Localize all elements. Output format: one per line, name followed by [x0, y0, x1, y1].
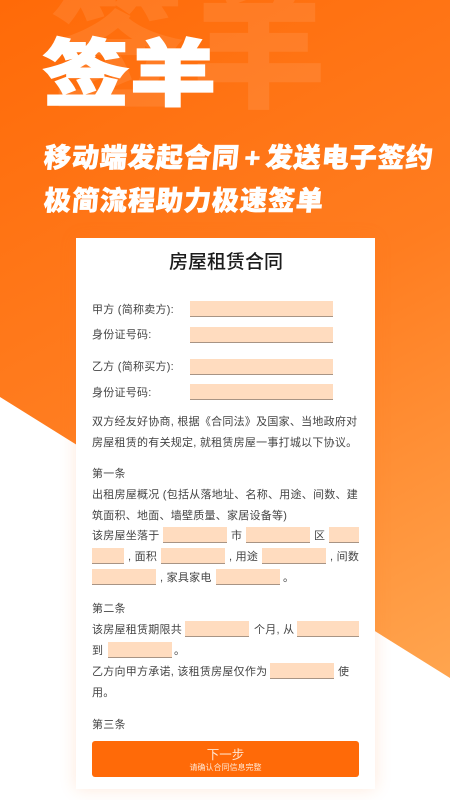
article three heading: 第三条 [92, 719, 126, 731]
article one fill-in rows: 区 [314, 530, 325, 542]
article one fill-in rows: 。 [283, 572, 294, 584]
intro paragraph: 双方经友好协商, 根据《合同法》及国家、当地政府对 [92, 416, 357, 428]
article one overview: 筑面积、地面、墙壁质量、家居设备等) [92, 510, 287, 522]
article one fill-in rows: , 家具家电 [160, 572, 212, 584]
contract heading: 房屋租赁合同 [169, 252, 283, 273]
article two fill-in rows: 。 [174, 645, 185, 657]
subtitle line one: 移动端发起合同 + 发送电子签约 [43, 143, 435, 173]
article two fill-in rows: 到 [92, 645, 103, 657]
intro paragraph: 房屋租赁的有关规定, 就租赁房屋一事打城以下协议。 [92, 437, 357, 449]
article two fill-in rows: 乙方向甲方承诺, 该租赁房屋仅作为 [92, 666, 267, 678]
article one fill-in rows: 该房屋坐落于 [92, 530, 160, 542]
article two fill-in rows: 个月, 从 [254, 624, 294, 636]
article two fill-in rows: 用。 [92, 687, 114, 699]
article one fill-in rows [92, 527, 359, 585]
article two heading: 第二条 [92, 603, 126, 615]
party B ID field [190, 384, 333, 400]
party A ID field [190, 327, 333, 343]
article one fill-in rows: , 间数 [330, 551, 359, 563]
article two fill-in rows: 使 [338, 666, 349, 678]
article two fill-in rows [92, 621, 359, 699]
article one overview [92, 488, 358, 522]
subtitle line two: 极简流程助力极速签单 [43, 186, 325, 216]
party A name label: 甲方 (简称卖方): [92, 304, 174, 316]
article two fill-in rows: 该房屋租赁期限共 [92, 624, 182, 636]
article one fill-in rows: , 面积 [128, 551, 157, 563]
party B name field [190, 359, 333, 375]
party B ID label: 身份证号码: [92, 387, 152, 399]
intro paragraph [92, 416, 357, 449]
title: 签羊 [43, 35, 217, 115]
next step button [92, 741, 359, 777]
party B name label: 乙方 (简称买方): [92, 361, 174, 373]
party A name field [190, 301, 333, 317]
next step button: 请确认合同信息完整 [190, 763, 262, 772]
article one fill-in rows: 市 [231, 530, 242, 542]
party A ID label: 身份证号码: [92, 329, 152, 341]
article one fill-in rows: , 用途 [229, 551, 258, 563]
article one heading: 第一条 [92, 468, 126, 480]
article one overview: 出租房屋概况 (包括从落地址、名称、用途、间数、建 [92, 489, 358, 501]
next step button: 下一步 [207, 748, 244, 762]
panel: contract form [76, 238, 375, 789]
